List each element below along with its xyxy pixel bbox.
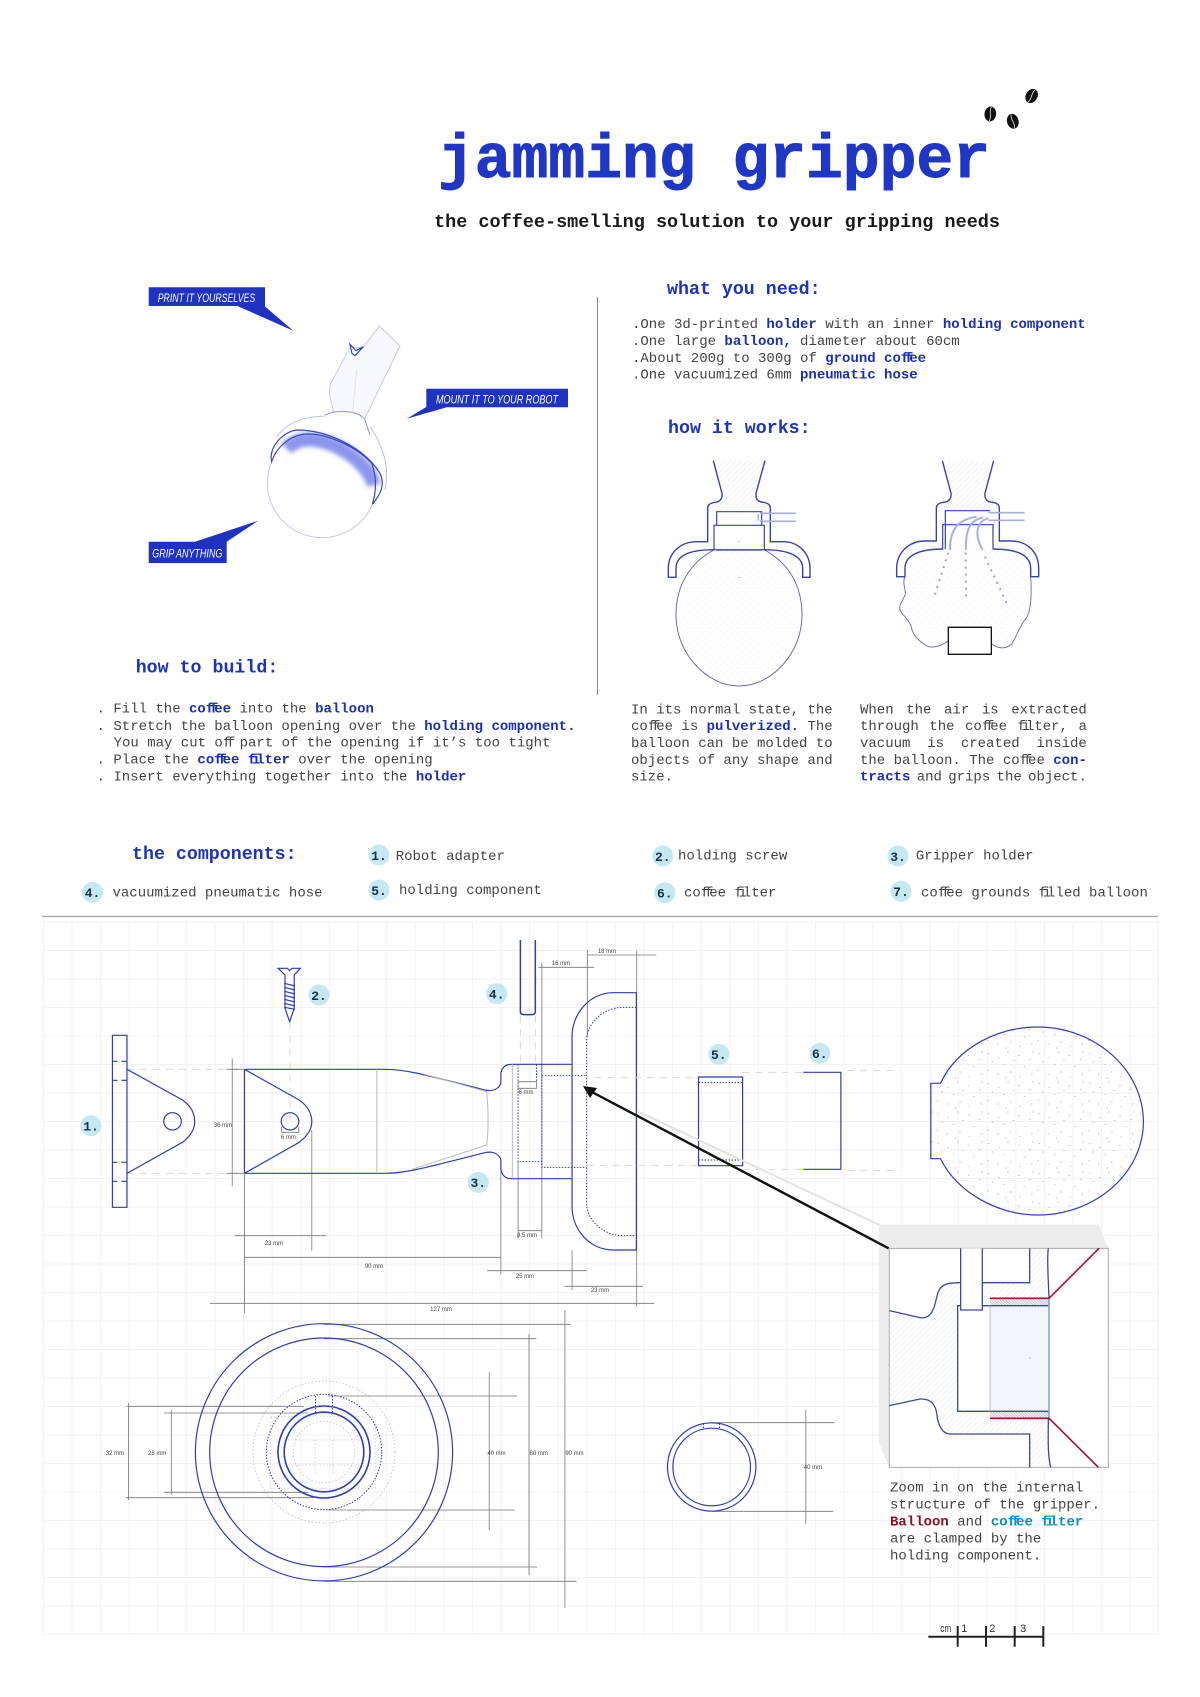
legend: 2.	[655, 850, 671, 865]
number badges on drawing	[80, 983, 830, 1193]
text block: vacuum state	[860, 702, 1087, 786]
dimensions	[126, 1310, 576, 1608]
text block: inset caption: structure of the gripper.	[890, 1498, 1100, 1514]
text block: vacuum state: vacuum is created inside	[860, 736, 1087, 752]
text block: normal state: size.	[631, 770, 673, 786]
legend: coffee grounds filled balloon	[921, 885, 1148, 901]
diagram: vacuum state	[897, 461, 1039, 654]
text block: normal state	[631, 702, 833, 786]
drawing: front view circles	[106, 1310, 584, 1608]
text block: how to build list: . Place the coffee filter over the opening	[97, 753, 433, 769]
dimension labels: side view: 18 mm	[598, 949, 616, 955]
drawing: filter parts and balloon	[587, 1027, 1143, 1215]
callout: grip anything: GRIP ANYTHING	[152, 547, 222, 561]
legend: 4.	[85, 886, 100, 901]
title: jamming gripper	[438, 125, 990, 196]
diagram: normal state	[668, 461, 810, 686]
text block: how to build list: . Insert everything together into the holder	[97, 770, 466, 786]
dimension labels: side view	[214, 949, 616, 1313]
text block: how to build list: . Fill the coffee into the balloon	[97, 702, 374, 718]
legend: vacuumized pneumatic hose	[112, 886, 323, 902]
callout: grip anything	[149, 521, 258, 563]
legend: 7.	[893, 885, 909, 900]
text block: what you need list	[632, 317, 1086, 384]
dimension labels: side view: 6 mm	[281, 1135, 296, 1141]
drawing: front view circles: 32 mm	[106, 1451, 124, 1457]
text block: inset caption: Zoom in on the internal	[890, 1481, 1083, 1497]
part 6: coffee filter	[803, 1072, 841, 1169]
arrow: zoom pointer	[583, 1086, 889, 1248]
vertical divider	[596, 297, 598, 695]
text block: how to build list: You may cut off part of the opening if it’s too tight	[114, 736, 550, 752]
inset: internal structure zoom	[879, 1225, 1108, 1467]
text block: normal state: balloon can be molded to	[631, 736, 833, 752]
number badges on drawing: 3.	[470, 1176, 486, 1191]
dimension labels: side view: 23 mm	[265, 1241, 283, 1247]
text block: normal state: coffee is pulverized. The	[631, 719, 833, 735]
text block: vacuum state: the balloon. The coffee con-	[860, 753, 1087, 769]
callout: print it yourselves: PRINT IT YOURSELVES	[158, 291, 255, 305]
drawing: front view circles: 28 mm	[148, 1451, 166, 1457]
callout: print it yourselves	[149, 287, 293, 331]
drawing: ring front view: 40 mm	[804, 1465, 822, 1471]
dimension lines	[127, 949, 656, 1313]
3d gripper illustration	[267, 326, 400, 538]
drawing: front view circles: 40 mm	[487, 1451, 506, 1457]
scale bar: 1	[961, 1623, 967, 1635]
text block: what you need list: .About 200g to 300g of ground coffee	[632, 351, 926, 367]
callout: mount it to your robot	[407, 389, 568, 419]
legend: coffee filter	[684, 885, 776, 901]
text block: what you need list: .One vacuumized 6mm pneumatic hose	[632, 368, 918, 384]
drawing: ring front view	[668, 1410, 834, 1524]
number badges on drawing: 1.	[83, 1120, 99, 1134]
subtitle: the coffee-smelling solution to your gripping needs	[434, 213, 1000, 233]
horizontal rule	[42, 916, 1158, 918]
dimension labels: side view: 36 mm	[214, 1123, 232, 1129]
text block: inset caption	[890, 1481, 1100, 1564]
legend: 5.	[371, 884, 387, 899]
dimension labels: side view: 16 mm	[552, 961, 570, 967]
text block: how to build list	[97, 702, 575, 786]
legend: holding component	[399, 883, 542, 899]
background grid	[43, 922, 1158, 1634]
text block: vacuum state: through the coffee filter, a	[860, 719, 1087, 735]
text block: normal state: objects of any shape and	[631, 753, 833, 769]
heading: what you need: what you need:	[667, 280, 821, 300]
scale bar: 3	[1020, 1623, 1026, 1635]
heading: how to build: how to build:	[136, 658, 278, 678]
part 5: holding component	[699, 1077, 743, 1166]
scale bar	[928, 1623, 1043, 1647]
drawing: adapter, holder and hose	[112, 940, 656, 1313]
heading: the components: the components:	[132, 845, 297, 865]
number badges on drawing: 2.	[311, 989, 327, 1004]
dimension labels: side view: 23 mm	[591, 1288, 609, 1294]
part 4: pneumatic hose	[520, 940, 535, 1015]
text block: vacuum state: When the air is extracted	[860, 702, 1087, 718]
icon: coffee beans	[984, 87, 1040, 130]
text block: what you need list: .One large balloon, diameter about 60cm	[632, 334, 960, 350]
dimension labels: side view: 127 mm	[430, 1307, 452, 1313]
legend: 1.	[371, 849, 387, 864]
dimension labels: side view: 6 mm	[518, 1090, 534, 1096]
number badges on drawing: 5.	[711, 1048, 727, 1063]
number badges on drawing: 6.	[812, 1047, 828, 1062]
text block: inset caption: are clamped by the	[890, 1532, 1041, 1548]
legend: Robot adapter	[396, 849, 505, 865]
dimension labels: side view: 25 mm	[516, 1274, 534, 1280]
legend: 6.	[657, 886, 673, 902]
drawing: front view circles: 80 mm	[530, 1451, 548, 1457]
legend: Gripper holder	[916, 848, 1034, 864]
text block: inset caption: holding component.	[890, 1548, 1041, 1564]
legend: 3.	[890, 850, 906, 865]
drawing: front view circles: 90 mm	[565, 1451, 584, 1457]
text block: how to build list: . Stretch the balloon opening over the holding component.	[97, 719, 575, 735]
dimension labels: side view: 90 mm	[365, 1264, 383, 1270]
scale bar: cm	[940, 1623, 951, 1635]
number badges on drawing: 4.	[489, 988, 505, 1002]
part 1: robot adapter	[112, 1035, 195, 1207]
scale bar: 2	[989, 1623, 995, 1635]
text block: normal state: In its normal state, the	[631, 702, 833, 718]
callout: mount it to your robot: MOUNT IT TO YOUR ROBOT	[436, 392, 559, 406]
part 7: coffee balloon	[931, 1027, 1143, 1215]
text block: vacuum state: tracts and grips the object.	[860, 770, 1087, 786]
part 2: screw	[278, 968, 300, 1022]
text block: what you need list: .One 3d-printed holder with an inner holding component	[632, 317, 1086, 333]
heading: how it works: how it works:	[668, 419, 811, 439]
legend: holding screw	[678, 848, 788, 864]
legend	[82, 844, 1148, 903]
dimension labels: side view: 8.5 mm	[517, 1233, 537, 1239]
text block: inset caption: Balloon and coffee filter	[890, 1514, 1083, 1530]
part 3: gripper holder	[244, 993, 636, 1250]
